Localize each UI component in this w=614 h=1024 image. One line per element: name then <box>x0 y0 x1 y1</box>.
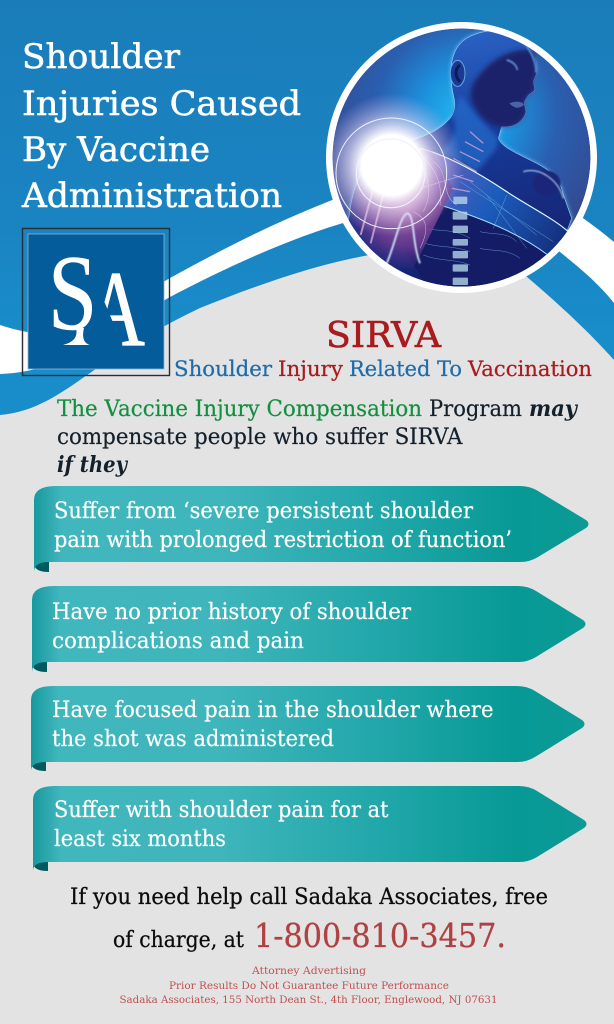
ribbon 1: pain with prolonged restriction of function’ <box>54 528 512 553</box>
ribbon 4 <box>33 786 586 871</box>
disclaimer: Prior Results Do Not Guarantee Future Performance <box>169 980 449 992</box>
title: Injuries Caused <box>22 84 301 123</box>
ribbon 2 <box>32 586 586 672</box>
intro paragraph: Program <box>429 397 522 422</box>
intro paragraph: The Vaccine Injury Compensation <box>57 397 422 422</box>
title: Administration <box>21 176 282 215</box>
intro paragraph: may <box>529 396 579 422</box>
call to action: If you need help call Sadaka Associates, free <box>70 885 548 910</box>
disclaimer: Attorney Advertising <box>251 965 366 977</box>
ribbon 4: least six months <box>54 827 226 852</box>
intro paragraph <box>57 396 579 478</box>
intro paragraph: compensate people who suffer SIRVA <box>57 425 464 450</box>
disclaimer: Sadaka Associates, 155 North Dean St., 4th Floor, Englewood, NJ 07631 <box>120 994 498 1006</box>
subheading: Shoulder <box>174 357 273 382</box>
ribbon 3: Have focused pain in the shoulder where <box>52 698 494 723</box>
heading: SIRVA: SIRVA <box>326 315 441 356</box>
anatomical figure medallion <box>320 22 597 293</box>
ribbon 1: Suffer from ‘severe persistent shoulder <box>54 499 473 524</box>
title: By Vaccine <box>22 130 210 169</box>
white swoosh left <box>0 197 350 374</box>
subheading <box>174 357 592 382</box>
logo: S <box>48 234 97 353</box>
ribbon 1 <box>34 486 588 572</box>
ribbon 4: Suffer with shoulder pain for at <box>54 798 389 823</box>
call to action <box>70 885 548 955</box>
subheading: Injury <box>278 357 344 382</box>
ribbon 2: Have no prior history of shoulder <box>52 600 411 625</box>
intro paragraph: if they <box>57 452 129 478</box>
logo: A <box>88 250 145 369</box>
call to action: of charge, at <box>113 928 244 953</box>
disclaimer <box>120 965 498 1006</box>
ribbon 3: the shot was administered <box>52 727 334 752</box>
white swoosh right <box>530 190 614 303</box>
subheading: Related To <box>349 357 462 382</box>
ribbon 2: complications and pain <box>52 629 304 654</box>
blue header shape <box>0 0 614 415</box>
call to action: 1-800-810-3457. <box>254 916 506 955</box>
logo <box>22 228 170 376</box>
subheading: Vaccination <box>467 357 592 382</box>
title: Shoulder <box>22 37 181 76</box>
ribbon 3 <box>31 686 584 771</box>
title <box>21 37 301 215</box>
